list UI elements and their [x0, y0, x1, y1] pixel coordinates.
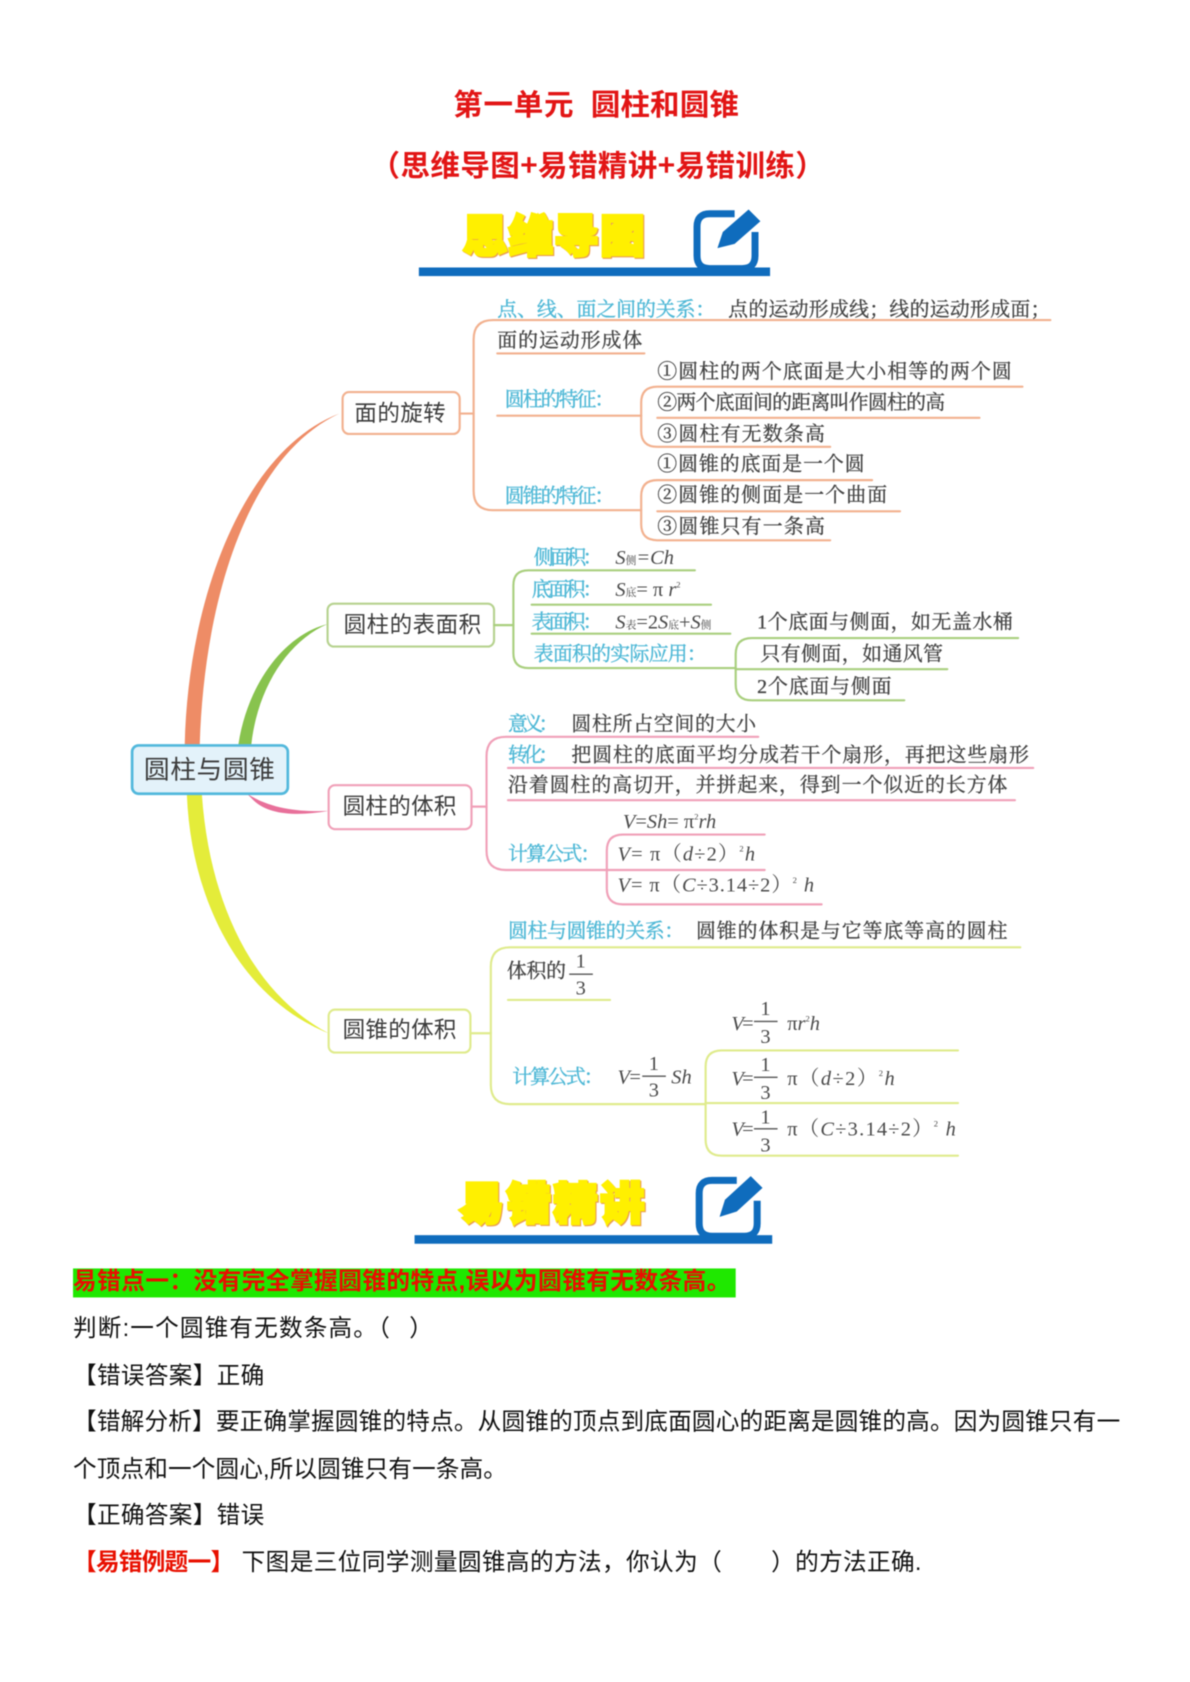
node: 面的旋转	[354, 396, 446, 428]
volume formulas	[508, 811, 814, 896]
derived formulas: π（d÷2）	[787, 1068, 877, 1090]
volume formulas: V=Sh= π	[623, 811, 694, 833]
meaning and conversion	[508, 707, 1029, 797]
connectors	[471, 737, 1033, 904]
cone formula: =	[629, 1067, 641, 1089]
connectors	[470, 947, 1020, 1156]
branch curve: orange	[185, 414, 339, 744]
volume formulas: 计算公式：	[508, 837, 600, 866]
central node: 圆柱与圆锥	[144, 750, 275, 787]
formulas: 2	[676, 580, 681, 590]
derived formulas: 1	[760, 998, 771, 1020]
question text: ）	[409, 1316, 433, 1342]
title	[371, 81, 825, 185]
icon: edit pencil	[697, 209, 760, 269]
derived formulas: 3	[760, 1082, 771, 1104]
cone features	[505, 453, 887, 538]
derived formulas: 3	[760, 1134, 771, 1156]
volume formulas: h	[798, 874, 814, 896]
title: （思维导图+易错精讲+易错训练）	[371, 142, 825, 185]
branch: 面的旋转	[343, 293, 1050, 540]
volume formulas: V= π（d÷2）	[618, 843, 738, 865]
cylinder features	[505, 361, 1012, 445]
formulas: S底= π r	[615, 579, 676, 601]
cylinder features: ①圆柱的两个底面是大小相等的两个圆	[657, 361, 1012, 383]
example question: 下图是三位同学测量圆锥高的方法，你认为（	[242, 1549, 722, 1576]
node	[343, 392, 460, 434]
branch curve: green	[238, 624, 328, 744]
volume formulas: V= π（C÷3.14÷2）	[618, 874, 792, 896]
mind map	[132, 293, 1050, 1156]
relation	[507, 915, 1008, 1000]
branch curve: yellow	[187, 795, 329, 1033]
relation: 圆柱与圆锥的关系：	[508, 915, 684, 944]
icon: edit pencil	[699, 1176, 763, 1236]
wrong answer: 【错误答案】正确	[73, 1362, 264, 1389]
derived formulas	[731, 998, 956, 1156]
example question	[73, 1549, 921, 1576]
volume formulas: 2	[739, 844, 744, 854]
analysis	[73, 1409, 1120, 1483]
cone formula: 计算公式：	[512, 1061, 604, 1090]
section banner: mind map: 思维导图	[463, 200, 644, 264]
title: 第一单元	[453, 81, 574, 124]
cone features: ②圆锥的侧面是一个曲面	[657, 485, 887, 507]
formulas: 侧面积：	[534, 541, 603, 570]
derived formulas: V	[731, 1068, 746, 1090]
cone formula: Sh	[671, 1067, 692, 1089]
cone formula: 3	[649, 1080, 659, 1102]
cone features: ③圆锥只有一条高	[657, 516, 825, 538]
node: 圆锥的体积	[343, 1013, 456, 1045]
branch: 圆柱的表面积	[328, 541, 1018, 700]
relation: 3	[576, 978, 586, 1000]
formulas: 底面积：	[532, 573, 603, 602]
derived formulas: πr	[787, 1013, 805, 1035]
meaning and conversion: 把圆柱的底面平均分成若干个扇形，再把这些扇形	[571, 745, 1029, 767]
formulas	[532, 541, 712, 667]
node	[328, 604, 494, 647]
derived formulas: 1	[760, 1054, 771, 1076]
formulas: S表=2S底+S侧	[615, 611, 712, 633]
node	[329, 1010, 470, 1053]
derived formulas: 2	[879, 1068, 883, 1078]
relation: 圆锥的体积是与它等底等高的圆柱	[696, 921, 1008, 943]
volume formulas: 2	[694, 812, 698, 822]
derived formulas: =	[742, 1068, 754, 1090]
derived formulas: h	[884, 1068, 895, 1090]
formulas: S侧=Ch	[615, 547, 674, 569]
correct answer: 【正确答案】错误	[73, 1502, 264, 1529]
meaning and conversion: 意义：	[508, 707, 558, 736]
question text: 判断:一个圆锥有无数条高。（	[73, 1315, 390, 1342]
meaning and conversion: 沿着圆柱的高切开，并拼起来，得到一个似近的长方体	[508, 775, 1008, 797]
example question: 【易错例题一】	[73, 1549, 234, 1576]
node: 圆柱的表面积	[344, 608, 481, 640]
connectors	[460, 320, 1050, 540]
branch curve: pink	[247, 794, 329, 814]
analysis: 个顶点和一个圆心,所以圆锥只有一条高。	[73, 1456, 507, 1483]
relation: 体积的	[507, 960, 566, 982]
cone features: 圆锥的特征：	[505, 480, 614, 509]
volume formulas: 2	[793, 875, 797, 885]
applications	[757, 611, 1013, 698]
derived formulas: h	[810, 1013, 820, 1035]
formulas: 表面积的实际应用：	[534, 638, 707, 667]
cone formula: V	[618, 1067, 633, 1089]
node	[329, 785, 471, 829]
applications: 2个底面与侧面	[757, 676, 892, 698]
derived formulas: 1	[760, 1106, 771, 1128]
example question: ）的方法正确.	[771, 1549, 921, 1576]
section banner: mind map	[419, 200, 770, 276]
derived formulas: =	[742, 1013, 754, 1035]
branch: 圆柱的体积	[329, 707, 1033, 904]
branch: 圆锥的体积	[329, 915, 1020, 1156]
analysis: 【错解分析】要正确掌握圆锥的特点。从圆锥的顶点到底面圆心的距离是圆锥的高。因为圆锥只有一	[73, 1409, 1120, 1436]
cone formula: 1	[649, 1053, 659, 1075]
meaning and conversion: 圆柱所占空间的大小	[571, 713, 757, 735]
relation text: 面的运动形成体	[497, 330, 642, 352]
volume formulas: rh	[698, 811, 716, 833]
derived formulas: V	[731, 1118, 746, 1140]
section banner: common mistakes: 易错精讲	[460, 1168, 644, 1232]
connectors	[494, 570, 1018, 700]
cylinder features: ③圆柱有无数条高	[657, 423, 825, 445]
section banner: common mistakes	[415, 1168, 772, 1244]
cone formula	[512, 1053, 692, 1102]
applications: 1个底面与侧面，如无盖水桶	[757, 611, 1013, 633]
volume formulas: h	[745, 843, 755, 865]
derived formulas: 2	[934, 1119, 938, 1129]
derived formulas: π（C÷3.14÷2）	[787, 1118, 933, 1140]
relation text	[497, 293, 1050, 352]
derived formulas: =	[742, 1118, 754, 1140]
applications: 只有侧面，如通风管	[760, 644, 943, 666]
derived formulas: V	[731, 1013, 746, 1035]
cylinder features: ②两个底面间的距离叫作圆柱的高	[657, 392, 945, 414]
cone features: ①圆锥的底面是一个圆	[657, 453, 865, 475]
derived formulas: 2	[805, 1013, 810, 1023]
node: 圆柱的体积	[343, 789, 456, 821]
meaning and conversion: 转化：	[508, 739, 558, 768]
relation text: 点的运动形成线；线的运动形成面；	[728, 299, 1050, 321]
title: 圆柱和圆锥	[591, 81, 739, 124]
formulas: 表面积：	[532, 605, 603, 634]
relation: 1	[576, 951, 586, 973]
central node	[132, 745, 288, 794]
highlighted mistake heading: 易错点一：没有完全掌握圆锥的特点,误以为圆锥有无数条高。	[73, 1268, 730, 1295]
derived formulas: 3	[760, 1026, 771, 1048]
derived formulas: h	[939, 1118, 956, 1140]
cylinder features: 圆柱的特征：	[505, 383, 614, 412]
relation text: 点、线、面之间的关系：	[497, 293, 715, 322]
